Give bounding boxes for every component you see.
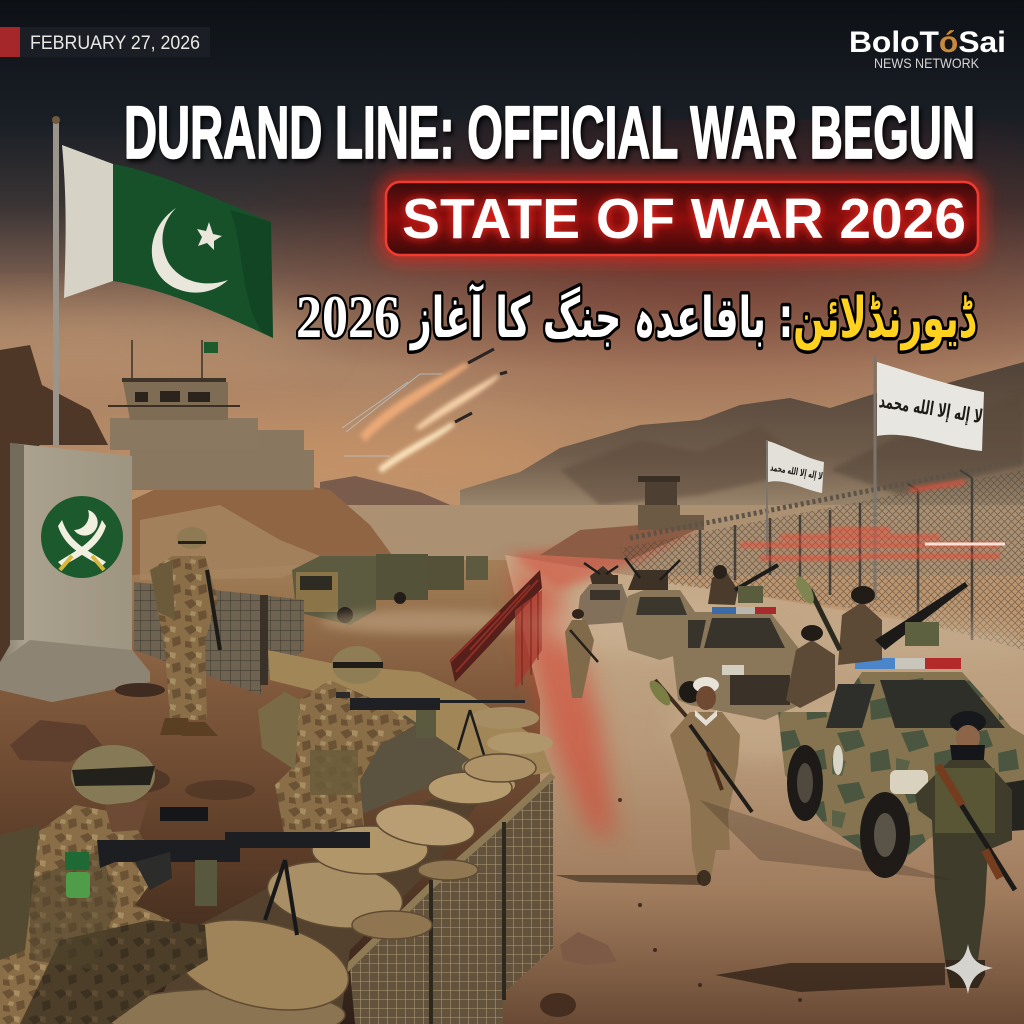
shoulder patches <box>65 852 89 870</box>
right watchtower <box>540 476 704 560</box>
date tag <box>0 27 210 57</box>
white turban fighter <box>646 677 752 886</box>
logo: BoloTóSai <box>849 26 1006 59</box>
missiles with trails <box>342 349 507 473</box>
distant walking fighter <box>565 609 598 698</box>
main pickup with gunners <box>778 574 1024 878</box>
left flagpole and pakistan flag <box>52 116 273 445</box>
black turban fighter <box>915 711 1015 988</box>
razor wire fence <box>450 570 542 690</box>
crouching soldier with machine gun <box>258 646 525 838</box>
dust behind convoy <box>320 610 540 634</box>
ground shadows <box>555 800 950 992</box>
urdu headline: ڈیورنڈلائن: باقاعدہ جنگ کا آغاز <box>409 282 977 351</box>
large white flag <box>877 362 984 451</box>
gabion wall behind standing soldier <box>134 582 304 695</box>
right road <box>480 555 1024 1024</box>
date tag: FEBRUARY 27, 2026 <box>30 33 200 54</box>
front gabions <box>340 775 553 1024</box>
mounted gun <box>875 582 968 650</box>
border fence <box>620 460 1024 650</box>
left ground <box>0 560 590 1024</box>
pickup gunners <box>590 566 668 590</box>
emblem: army crest <box>41 496 123 578</box>
rocks on left ground <box>10 683 255 800</box>
red subtitle banner: STATE OF WAR 2026 <box>402 187 966 251</box>
mid pickup with gunner <box>672 565 800 720</box>
foreground soldier with machine gun <box>0 745 370 1024</box>
rear gunners <box>786 602 882 708</box>
front sandbags <box>105 754 536 1024</box>
red subtitle banner: STATE OF WAR 2026 <box>402 187 966 251</box>
small white flag <box>768 441 824 493</box>
road dust cloud <box>540 595 1024 760</box>
rock outcrop left <box>0 345 392 670</box>
urdu headline: 2026 <box>296 284 400 350</box>
distant pickups <box>578 558 695 660</box>
small white flag: لا إله إلا الله محمد <box>769 461 824 482</box>
concrete barrier with emblem <box>0 443 150 702</box>
foreground rocks <box>540 798 802 1017</box>
large white flag: لا إله إلا الله محمد <box>878 389 984 428</box>
red border glow <box>510 528 700 840</box>
fort outpost <box>108 340 314 490</box>
small pakistan flag <box>204 342 218 353</box>
convoy of trucks <box>292 554 488 625</box>
background mountains <box>320 362 1024 575</box>
taliban white flags <box>767 355 984 600</box>
standing soldier <box>150 527 220 736</box>
logo: NEWS NETWORK <box>874 55 980 71</box>
red tracer streaks <box>740 482 1005 558</box>
back sandbags <box>268 650 553 820</box>
sparkle watermark <box>944 944 993 994</box>
